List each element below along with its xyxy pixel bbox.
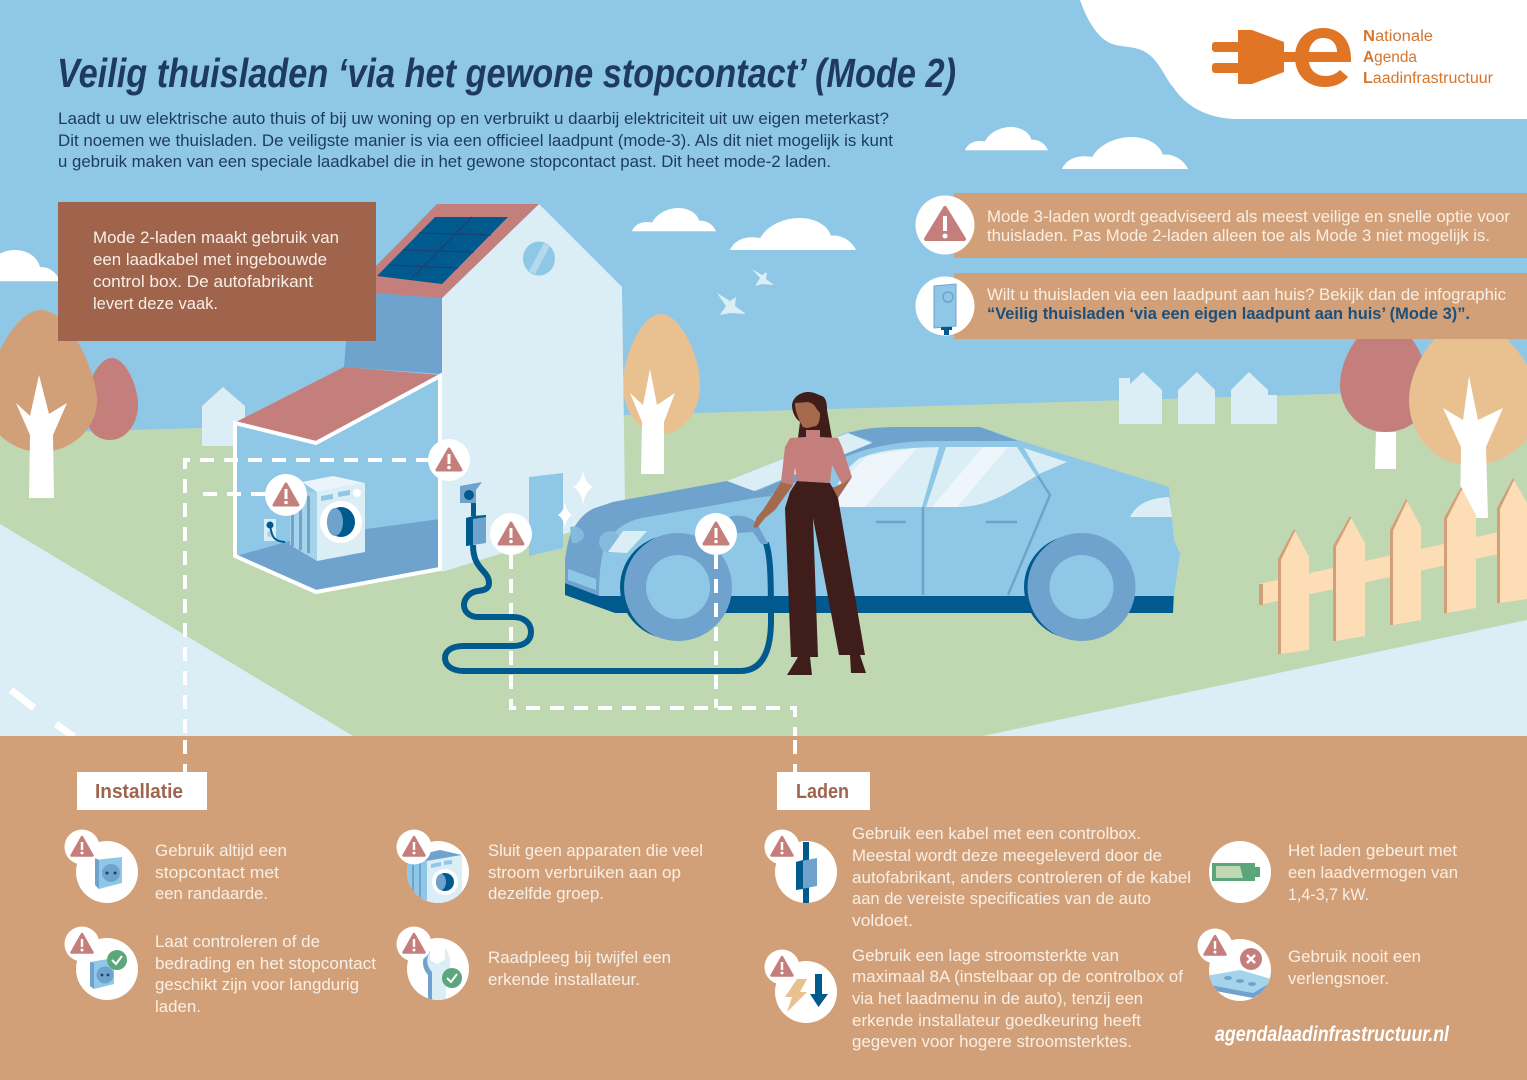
dashed connectors in band [185,740,795,772]
dashed lines [185,460,795,775]
heading: Installatie [77,772,207,810]
top [781,430,852,485]
item: kabel met controlbox: voldoet. [852,912,913,930]
item: lage stroomsterkte: erkende installateur goedkeuring heeft [852,1012,1141,1030]
intro text: Dit noemen we thuisladen. De veiligste manier is via een officieel laadpunt (mode-3). Als dit niet mogelijk is kunt [58,132,893,150]
wall socket with cord [264,519,285,542]
tree: right pink [1340,320,1430,469]
car [565,427,1180,641]
banner: mode 3 infographic: “Veilig thuisladen ‘via een eigen laadpunt aan huis’ (Mode 3)”. [987,305,1470,323]
charging cable [445,543,771,671]
main wall [442,204,625,572]
windshield [727,433,872,491]
heading: Installatie: Installatie [95,781,183,803]
item: geen verlengsnoer [1198,928,1421,1001]
item: stopcontact randaarde: een randaarde. [155,885,268,903]
warning badge: cable [490,513,532,555]
item: laadvermogen: Het laden gebeurt met [1288,842,1457,860]
banner: mode 3 infographic [916,273,1527,339]
washing machine [290,476,365,561]
round window [523,242,555,276]
item: stopcontact randaarde [64,830,287,903]
banner: mode 3 advice: Mode 3-laden wordt geadviseerd als meest veilige en snelle optie voor [987,208,1511,226]
item: lage stroomsterkte: Gebruik een lage stroomsterkte van [852,947,1119,965]
item: bedrading controleren: geschikt zijn voor langdurig [155,976,359,994]
logo text [1363,28,1493,87]
headlight [568,527,647,590]
item: lage stroomsterkte: maximaal 8A (instelbaar op de controlbox of [852,968,1183,986]
heading: Laden [777,772,870,810]
banner: mode 3 advice [916,193,1527,258]
grass [0,388,1527,736]
logo [1212,28,1493,87]
icon: plug e [1212,28,1351,87]
item: bedrading controleren [64,926,376,1016]
item: bedrading controleren: Laat controleren of de [155,933,320,951]
logo text: Nationale [1363,28,1433,45]
item: lage stroomsterkte: via het laadmenu in de auto), tenzij een [852,990,1143,1008]
side room [234,367,440,592]
item: bedrading controleren: bedrading en het stopcontact [155,955,376,973]
tree: beside house [623,314,700,474]
panel: mode 2 explanation: Mode 2-laden maakt gebruik van [93,229,339,247]
bottom band [0,736,1527,1080]
title: Veilig thuisladen ‘via het gewone stopcontact’ (Mode 2) [57,50,956,96]
item: laadvermogen: 1,4-3,7 kW. [1288,886,1369,904]
panel: mode 2 explanation: levert deze vaak. [93,295,218,313]
house [234,204,625,592]
item: kabel met controlbox: aan de vereiste specificaties van de auto [852,890,1151,908]
wall socket plug [460,482,482,516]
item: kabel met controlbox [764,825,1191,930]
item: lage stroomsterkte [764,947,1183,1051]
tree: left pink [85,358,138,440]
tree: left tan [0,310,97,498]
item: raadpleeg installateur: erkende installateur. [488,971,640,989]
item: kabel met controlbox: autofabrikant, anders controleren of de kabel [852,869,1191,887]
item: kabel met controlbox: Meestal wordt deze meegeleverd door de [852,847,1162,865]
item: stopcontact randaarde: stopcontact met [155,864,279,882]
logo text: Laadinfrastructuur [1363,70,1493,87]
item: bedrading controleren: laden. [155,998,201,1016]
side roof [234,367,440,442]
woman [753,392,866,675]
item: raadpleeg installateur: Raadpleeg bij twijfel een [488,949,671,967]
banner: mode 3 advice: thuisladen. Pas Mode 2-laden alleen toe als Mode 3 niet mogelijk is. [987,227,1490,245]
banner: mode 3 infographic: Wilt u thuisladen via een laadpunt aan huis? Bekijk dan de infographic [987,286,1506,304]
panel: mode 2 explanation: een laadkabel met ingebouwde [93,251,327,269]
item: lage stroomsterkte: gegeven voor hogere stroomsterktes. [852,1033,1132,1051]
roof dark [755,427,1018,494]
road left [0,524,353,736]
rear wheel [1024,533,1136,641]
door lines [876,476,1050,595]
item: geen apparaten: stroom verbruiken aan op [488,864,681,882]
intro text: Laadt u uw elektrische auto thuis of bij uw woning op en verbruikt u daarbij elektriciteit uit uw eigen meterkast? [58,110,889,128]
heading: Laden: Laden [796,781,849,803]
solar panel [377,217,508,284]
item: raadpleeg installateur [396,926,671,1002]
item: kabel met controlbox: Gebruik een kabel met een controlbox. [852,825,1141,843]
item: geen apparaten: dezelfde groep. [488,885,604,903]
face [795,402,820,428]
birds [717,269,774,315]
shaded wall [344,292,442,374]
warning badge: washing machine [265,474,307,516]
side windows [830,447,1067,507]
hood [565,481,772,596]
door [529,473,563,556]
sill [565,583,1174,613]
trousers [785,481,865,657]
item: geen verlengsnoer: Gebruik nooit een [1288,948,1421,966]
logo white corner [1080,0,1527,119]
icon: charge point [916,276,974,336]
item: stopcontact randaarde: Gebruik altijd een [155,842,287,860]
tree: right tan [1409,320,1527,518]
item: geen apparaten: Sluit geen apparaten die veel [488,842,703,860]
warning badge: side room [428,439,470,481]
sparkles [558,470,593,528]
rear light [1130,497,1172,517]
fence [1259,478,1527,654]
panel: mode 2 explanation: control box. De autofabrikant [93,273,313,291]
intro text [58,110,893,171]
item: geen verlengsnoer: verlengsnoer. [1288,970,1389,988]
control box [466,515,486,546]
intro text: u gebruik maken van een speciale laadkabel die in het gewone stopcontact past. Dit heet mode-2 laden. [58,153,831,171]
roof [376,204,539,298]
item: laadvermogen [1209,841,1458,904]
background houses [202,372,1277,446]
front wheel [620,533,732,641]
item: geen apparaten [396,830,703,905]
item: laadvermogen: een laadvermogen van [1288,864,1458,882]
right arm [824,473,852,498]
dashed line over front wheel [714,555,718,708]
road right [983,620,1527,736]
road markings [11,690,74,737]
clouds [0,127,1188,281]
body [565,427,1180,596]
shoes [787,655,866,675]
panel: mode 2 explanation [58,202,376,341]
icon: warning [916,196,974,254]
left arm [753,482,793,528]
warning badge: car [695,513,737,555]
charging plug [729,516,768,544]
logo text: Agenda [1363,49,1417,66]
hair [792,392,832,438]
website url: agendalaadinfrastructuur.nl [1215,1023,1450,1046]
